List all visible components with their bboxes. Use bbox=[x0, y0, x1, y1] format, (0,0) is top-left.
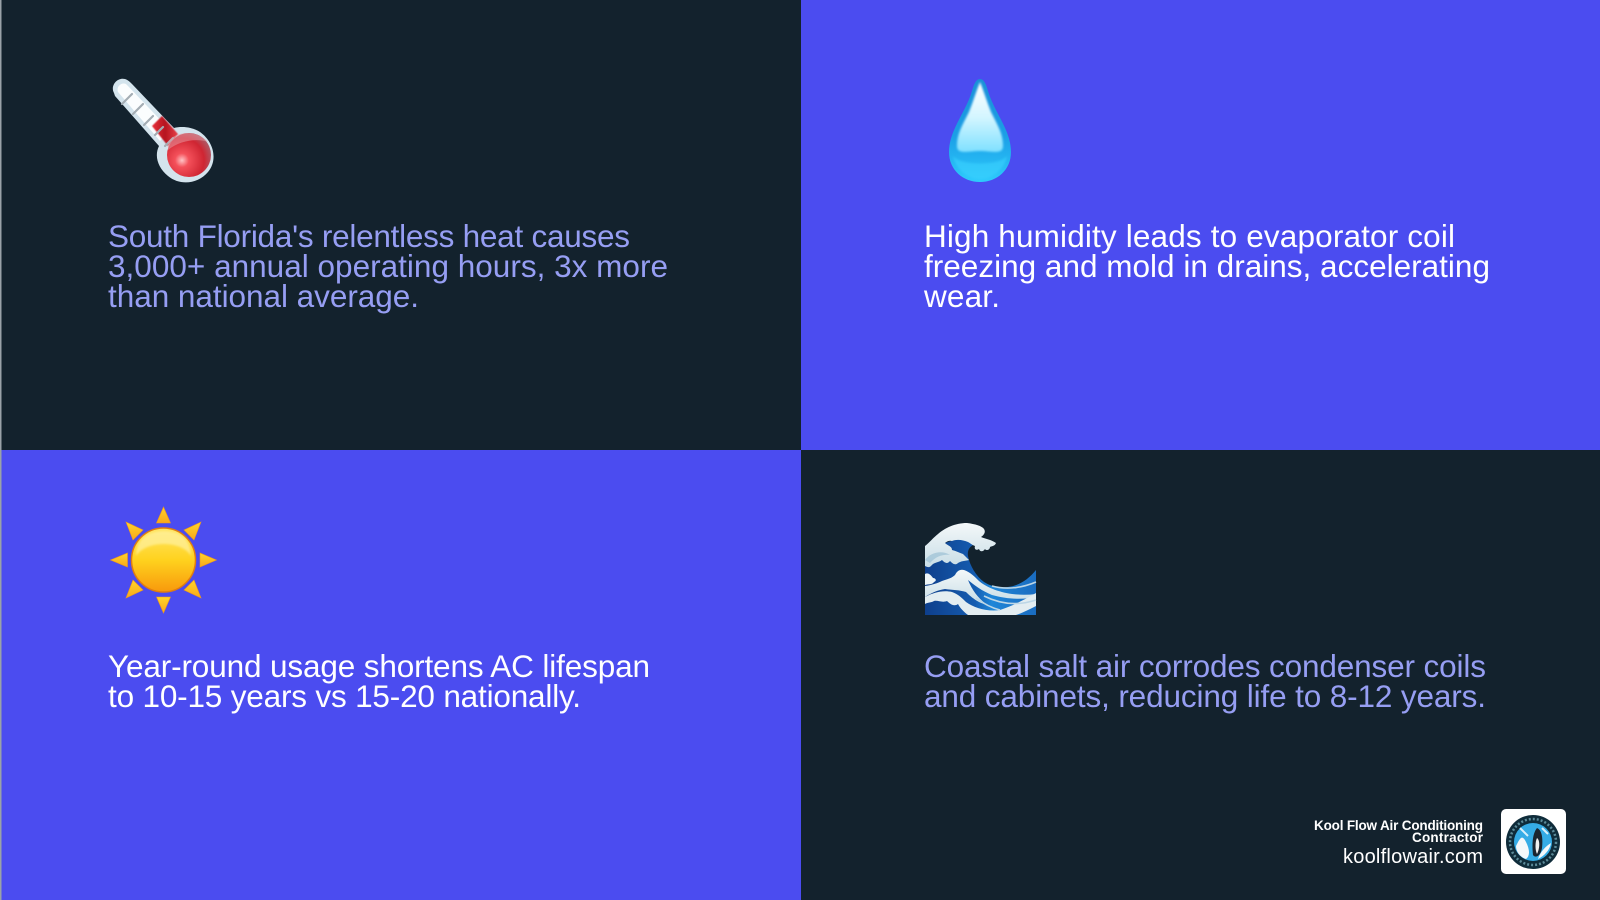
panel: humidity bbox=[801, 0, 1600, 450]
brand name: Kool Flow Air Conditioning bbox=[1314, 818, 1483, 833]
page left edge bbox=[0, 0, 2, 900]
text: humidity: freezing and mold in drains, accelerating bbox=[924, 248, 1490, 284]
text: humidity: wear. bbox=[923, 278, 1000, 314]
crest foam bbox=[925, 523, 996, 567]
icon: wave bbox=[925, 523, 1036, 615]
text: heat: South Florida's relentless heat causes bbox=[108, 218, 630, 254]
brand name: Contractor bbox=[1412, 830, 1484, 845]
text: humidity: High humidity leads to evaporator coil bbox=[924, 218, 1455, 254]
text: usage: to 10-15 years vs 15-20 nationally. bbox=[108, 678, 581, 714]
brand block bbox=[1314, 809, 1566, 874]
brand url: koolflowair.com bbox=[1343, 846, 1483, 868]
icon: water drop bbox=[949, 79, 1011, 182]
lower foam bbox=[925, 591, 1036, 615]
wave body bbox=[925, 538, 1036, 615]
text: usage: Year-round usage shortens AC lifespan bbox=[108, 648, 650, 684]
logo badge bbox=[1501, 809, 1566, 874]
sea stripes bbox=[976, 582, 1036, 610]
panel: sun bbox=[2, 450, 801, 900]
panel: heat bbox=[2, 0, 801, 450]
panel: salt air bbox=[801, 450, 1600, 900]
text: heat: than national average. bbox=[108, 278, 419, 314]
text: heat: 3,000+ annual operating hours, 3x more bbox=[108, 248, 668, 284]
icon: thermometer bbox=[113, 79, 214, 182]
text: salt air: and cabinets, reducing life to 8-12 years. bbox=[924, 678, 1486, 714]
icon: sun bbox=[110, 507, 216, 613]
mid foam band bbox=[925, 570, 1036, 604]
text: salt air: Coastal salt air corrodes condenser coils bbox=[924, 648, 1486, 684]
